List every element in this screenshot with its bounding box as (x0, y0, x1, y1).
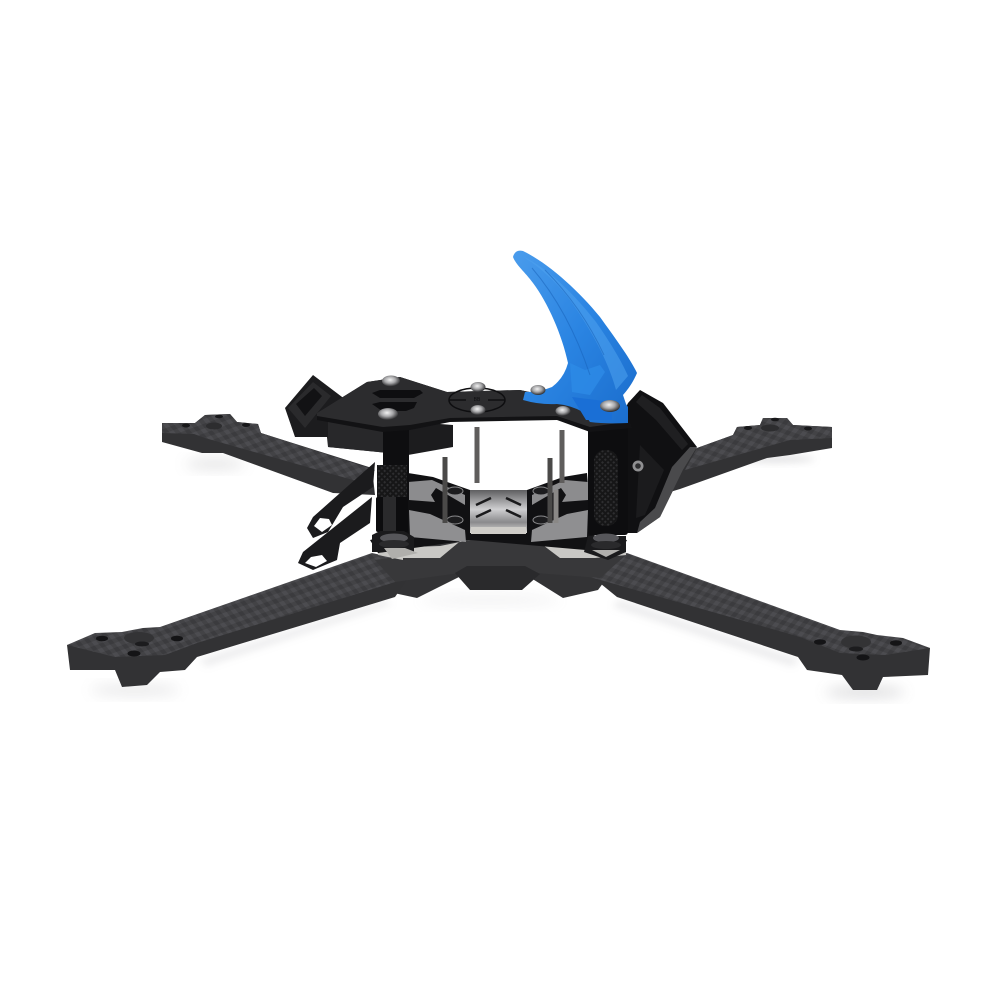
back left arm (162, 414, 375, 495)
titanium rods (445, 427, 562, 523)
shark fin antenna mount (513, 251, 637, 423)
right tpu camera mount (620, 390, 697, 533)
top carbon plate: BB (474, 397, 481, 403)
top carbon plate (317, 377, 632, 432)
left tpu camera mount (285, 375, 453, 455)
right standoff (584, 425, 628, 560)
front lower plate body (380, 560, 620, 598)
soft floor shadows (90, 456, 905, 696)
top plate screws (378, 376, 620, 420)
centre x plate (375, 520, 626, 590)
antenna straps (298, 462, 375, 570)
chrome stack plate (370, 473, 627, 553)
left standoff (372, 425, 418, 559)
front right arm (583, 553, 930, 690)
back right arm (660, 418, 832, 495)
front left arm (67, 553, 418, 687)
